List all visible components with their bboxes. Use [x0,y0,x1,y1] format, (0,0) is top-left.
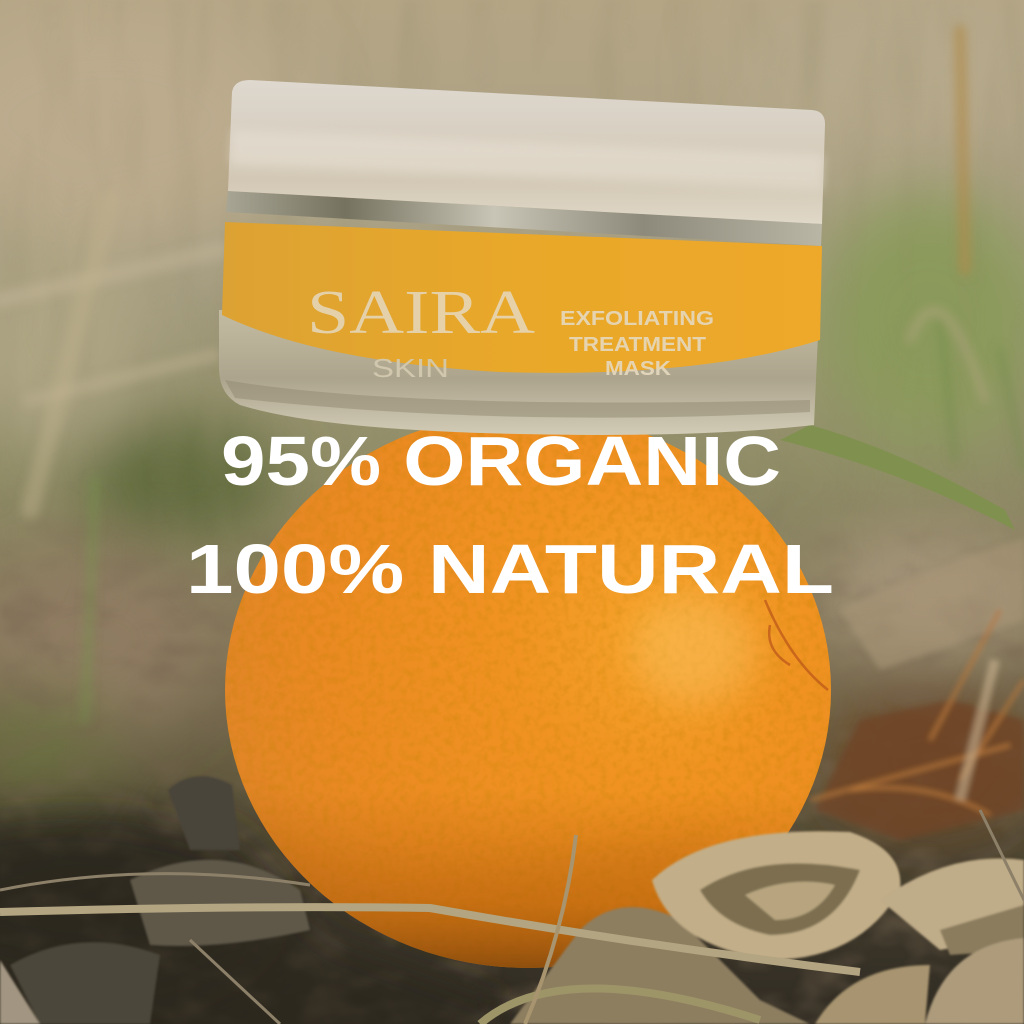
twigs [0,907,860,972]
headline [186,422,834,608]
jar: yellow product [222,222,822,373]
jar: label: MASK [605,358,672,380]
forest floor: twigs and fungi [0,776,1024,1024]
jar: glass base [219,310,818,435]
headline line 1: 95% ORGANIC [221,422,781,500]
jar: label: TREATMENT [569,334,706,356]
cosmetic jar [219,80,825,435]
jar: label: EXFOLIATING [560,308,714,330]
orange [220,410,840,980]
grass blade right of jar [780,425,1015,530]
dark soil left [0,819,500,1024]
bracket fungi left [0,776,310,1024]
jar: label [307,279,714,383]
bracket fungi right [510,831,1024,1024]
jar: label: SAIRA [307,279,535,347]
headline line 2: 100% NATURAL [186,530,834,608]
jar: lid [228,80,825,224]
jar: silver band [226,191,822,246]
dry leaves, right side [810,540,1024,840]
jar: label: SKIN [372,353,449,383]
